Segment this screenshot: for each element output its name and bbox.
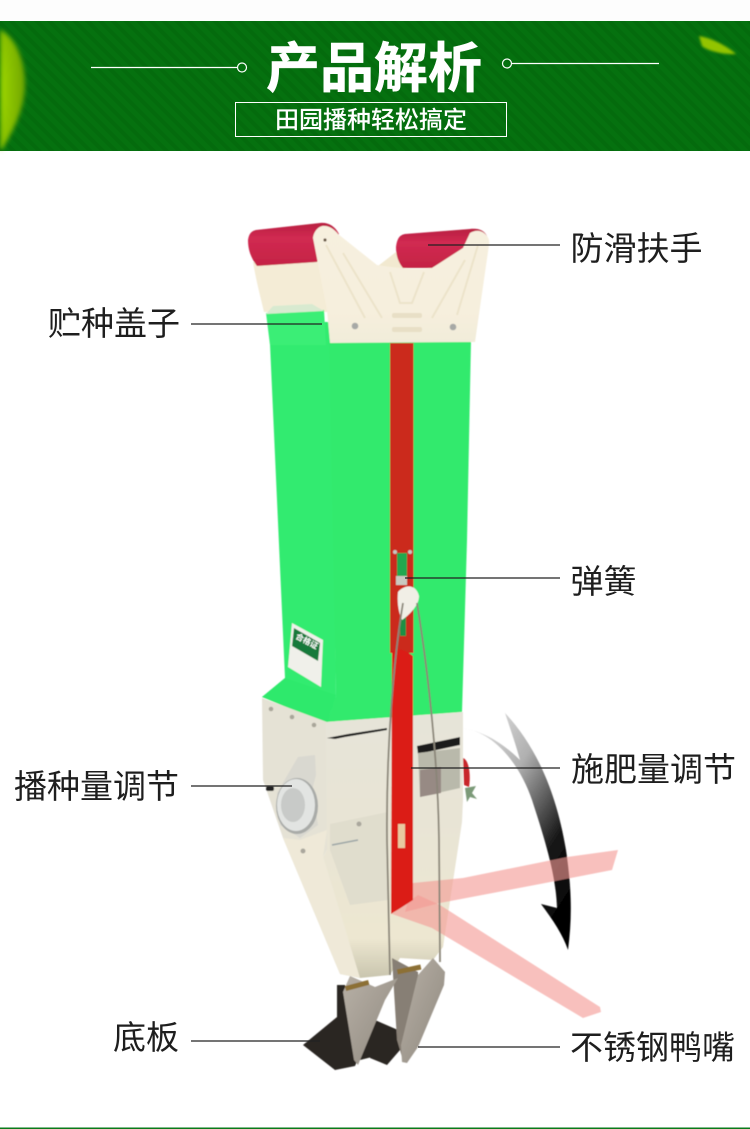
icon: right leaf — [699, 36, 736, 54]
bill hinge — [397, 965, 421, 974]
front handle plate — [313, 226, 489, 343]
feed slot — [327, 728, 387, 739]
label: spring: 弹簧 — [570, 563, 636, 600]
label: stainless bill: 不锈钢鸭嘴 — [570, 1029, 735, 1066]
certificate sticker: 合格证 — [294, 631, 320, 651]
red lever upper — [390, 343, 414, 653]
wires — [387, 603, 440, 975]
spring — [396, 576, 419, 620]
title: 产品解析 — [266, 39, 482, 99]
header banner — [0, 0, 750, 151]
subtitle box: 田园播种轻松搞定 — [275, 107, 467, 134]
label: anti-slip grip: 防滑扶手 — [570, 230, 702, 267]
green hopper — [262, 304, 471, 724]
label: seed lid: 贮种盖子 — [48, 305, 180, 342]
lever slot — [398, 824, 405, 848]
lower housing — [262, 698, 463, 978]
certificate sticker — [288, 623, 323, 687]
icon: rotation arrow — [462, 713, 571, 950]
subtitle box — [236, 102, 506, 136]
left roller — [248, 223, 339, 266]
left duck bill — [343, 976, 398, 1065]
icon: left leaf — [0, 30, 25, 150]
label: seed rate: 播种量调节 — [14, 768, 179, 805]
bottom rule — [0, 1128, 750, 1129]
right duck bill — [392, 958, 445, 1063]
back of handle — [253, 258, 328, 312]
label: fertilizer rate: 施肥量调节 — [571, 751, 736, 788]
label: base plate: 底板 — [113, 1019, 179, 1056]
ghost handle: lowered — [392, 895, 601, 1018]
left title rule — [91, 63, 246, 72]
fertilizer rate window — [417, 737, 477, 802]
right title rule — [502, 59, 659, 68]
product: seeder — [248, 223, 618, 1070]
back of right handle — [378, 252, 405, 270]
seed rate dial — [266, 755, 318, 838]
right roller — [396, 229, 487, 268]
red lever lower — [391, 649, 413, 914]
black base plate — [303, 985, 400, 1070]
ghost handle: raised — [405, 850, 618, 912]
hopper lid — [266, 310, 326, 345]
